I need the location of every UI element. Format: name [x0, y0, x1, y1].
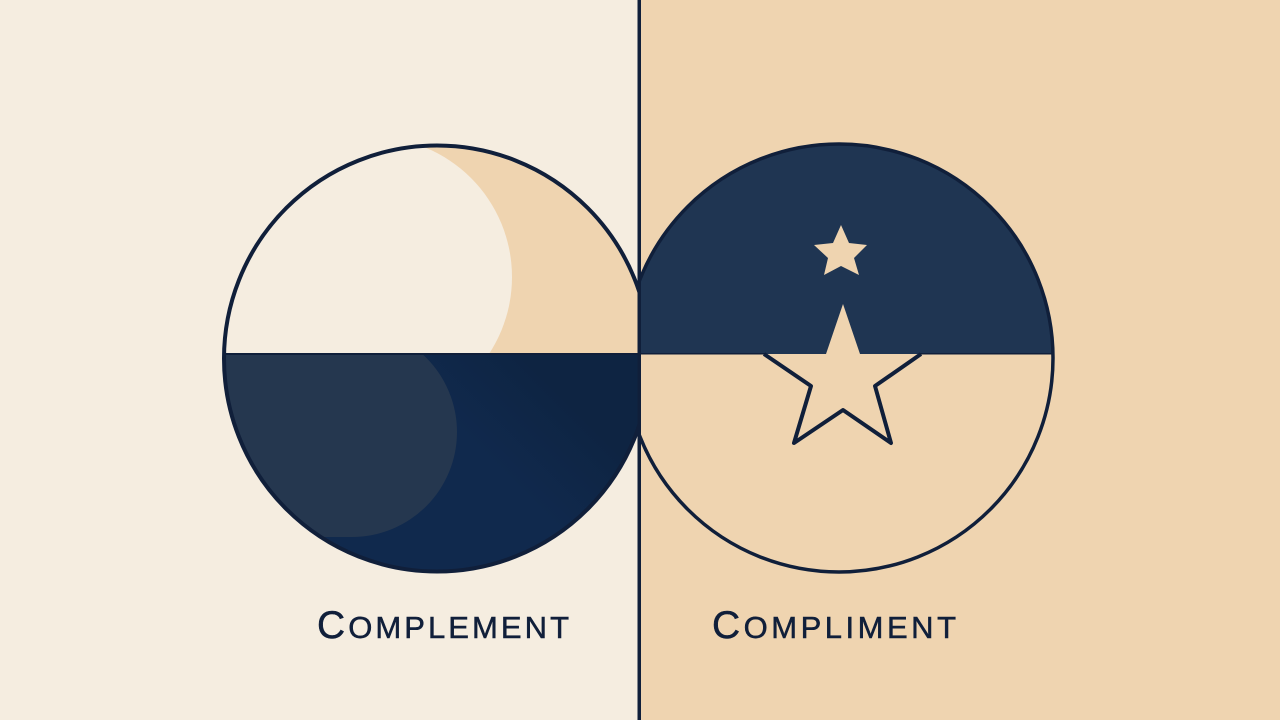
horizontal divider [224, 353, 639, 355]
icon: large star [764, 304, 921, 443]
lower half: navy fill [226, 355, 638, 570]
label: compliment: COMPLIMENT [712, 604, 956, 647]
panel: compliment background [639, 0, 1280, 720]
label: complement: COMPLEMENT [317, 604, 569, 647]
horizontal divider right [920, 353, 1052, 354]
circle outline [625, 144, 1053, 572]
compliment circle [625, 140, 1055, 572]
vertical centre divider [638, 0, 641, 720]
panel: complement background [0, 0, 639, 720]
complement circle [223, 137, 650, 574]
upper half: tan and cream moon [426, 148, 638, 353]
icon: small star [814, 225, 867, 275]
horizontal divider [640, 353, 765, 354]
circle outline [224, 146, 650, 572]
upper half: navy fill [625, 140, 1055, 354]
